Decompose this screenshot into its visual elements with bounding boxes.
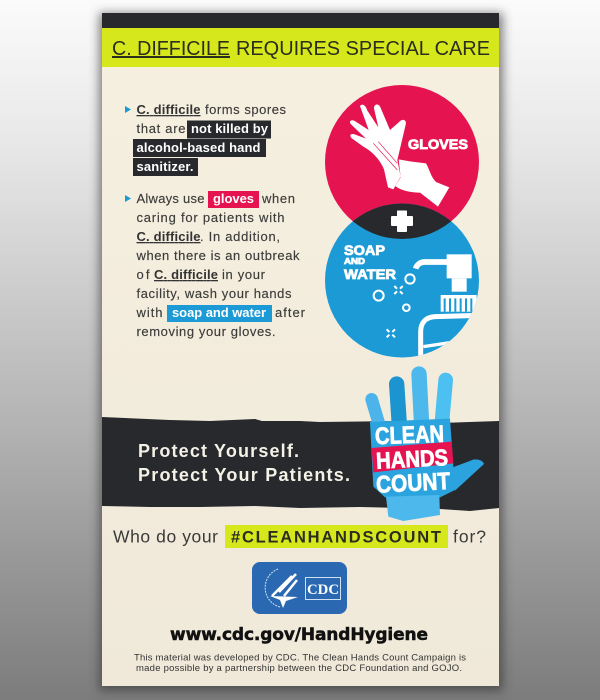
bullet 2 text: soap and water [172, 305, 266, 320]
poster background [102, 13, 499, 686]
infographic poster [92, 6, 510, 696]
title banner: C. DIFFICILE [112, 38, 230, 60]
band slogan: Protect Yourself. [138, 441, 299, 461]
bullet 2 text: when [261, 191, 295, 206]
bullet 1 text: C. difficile [136, 102, 200, 117]
bullet 2 text: removing your gloves. [136, 324, 276, 339]
gloves circle: GLOVES [408, 136, 468, 152]
website url: www.cdc.gov/HandHygiene [170, 625, 428, 645]
dark brush band [102, 417, 499, 511]
gloves circle [325, 85, 479, 239]
bullet 1 text [125, 102, 286, 176]
plus overlap [352, 204, 452, 239]
bullet 2 text: facility, wash your hands [136, 286, 292, 301]
bullet 1 text: not killed by [191, 121, 269, 136]
hashtag question [113, 525, 486, 548]
title banner: REQUIRES SPECIAL CARE [236, 38, 490, 60]
bullet 1 text: sanitizer. [136, 159, 194, 174]
clean hands count glove logo: HANDS [375, 444, 449, 474]
hashtag question: Who do your [113, 526, 218, 546]
cdc logo [252, 562, 347, 614]
bullet 2 text: after [275, 305, 306, 320]
band slogan: Protect Your Patients. [138, 465, 350, 485]
attribution note: This material was developed by CDC. The Clean Hands Count Campaign is [134, 652, 466, 664]
soap and water circle [325, 204, 480, 363]
bullet 2 text: with [136, 305, 162, 320]
icon: glove being removed [350, 105, 449, 207]
bullet 2 text: . In addition, [200, 229, 280, 244]
bullet 2 text: caring for patients with [136, 210, 284, 225]
bullet 1 text: forms spores [205, 102, 286, 117]
bullet 2 text: in your [222, 267, 266, 282]
bullet 2 text: Always use [136, 191, 204, 206]
band slogan [138, 441, 350, 485]
attribution note [134, 652, 466, 674]
hashtag question: #CLEANHANDSCOUNT [231, 528, 441, 546]
bullet 2 text: when there is an outbreak [136, 248, 300, 263]
bullet 2 text: C. difficile [136, 229, 200, 244]
bullet 1 text: that are [136, 121, 186, 136]
bullet 2 text [125, 191, 306, 339]
icon: soap dispenser and sink [374, 254, 480, 363]
title banner [102, 28, 499, 67]
cdc logo: CDC [307, 582, 339, 598]
clean hands count glove logo: COUNT [375, 468, 451, 499]
hashtag question: for? [453, 526, 486, 546]
clean hands count glove logo [370, 374, 484, 521]
soap and water circle: WATER [344, 266, 396, 282]
bullet 2 text: gloves [213, 191, 254, 206]
bullet 2 text: of [136, 267, 150, 282]
attribution note: made possible by a partnership between the CDC Foundation and GOJO. [136, 663, 462, 674]
clean hands count glove logo: CLEAN [375, 421, 444, 450]
top dark bar [102, 13, 499, 28]
soap and water circle: AND [344, 257, 365, 266]
soap and water circle: SOAP [344, 242, 385, 258]
bullet 1 text: alcohol-based hand [136, 140, 261, 155]
bullet 2 text: C. difficile [154, 267, 218, 282]
